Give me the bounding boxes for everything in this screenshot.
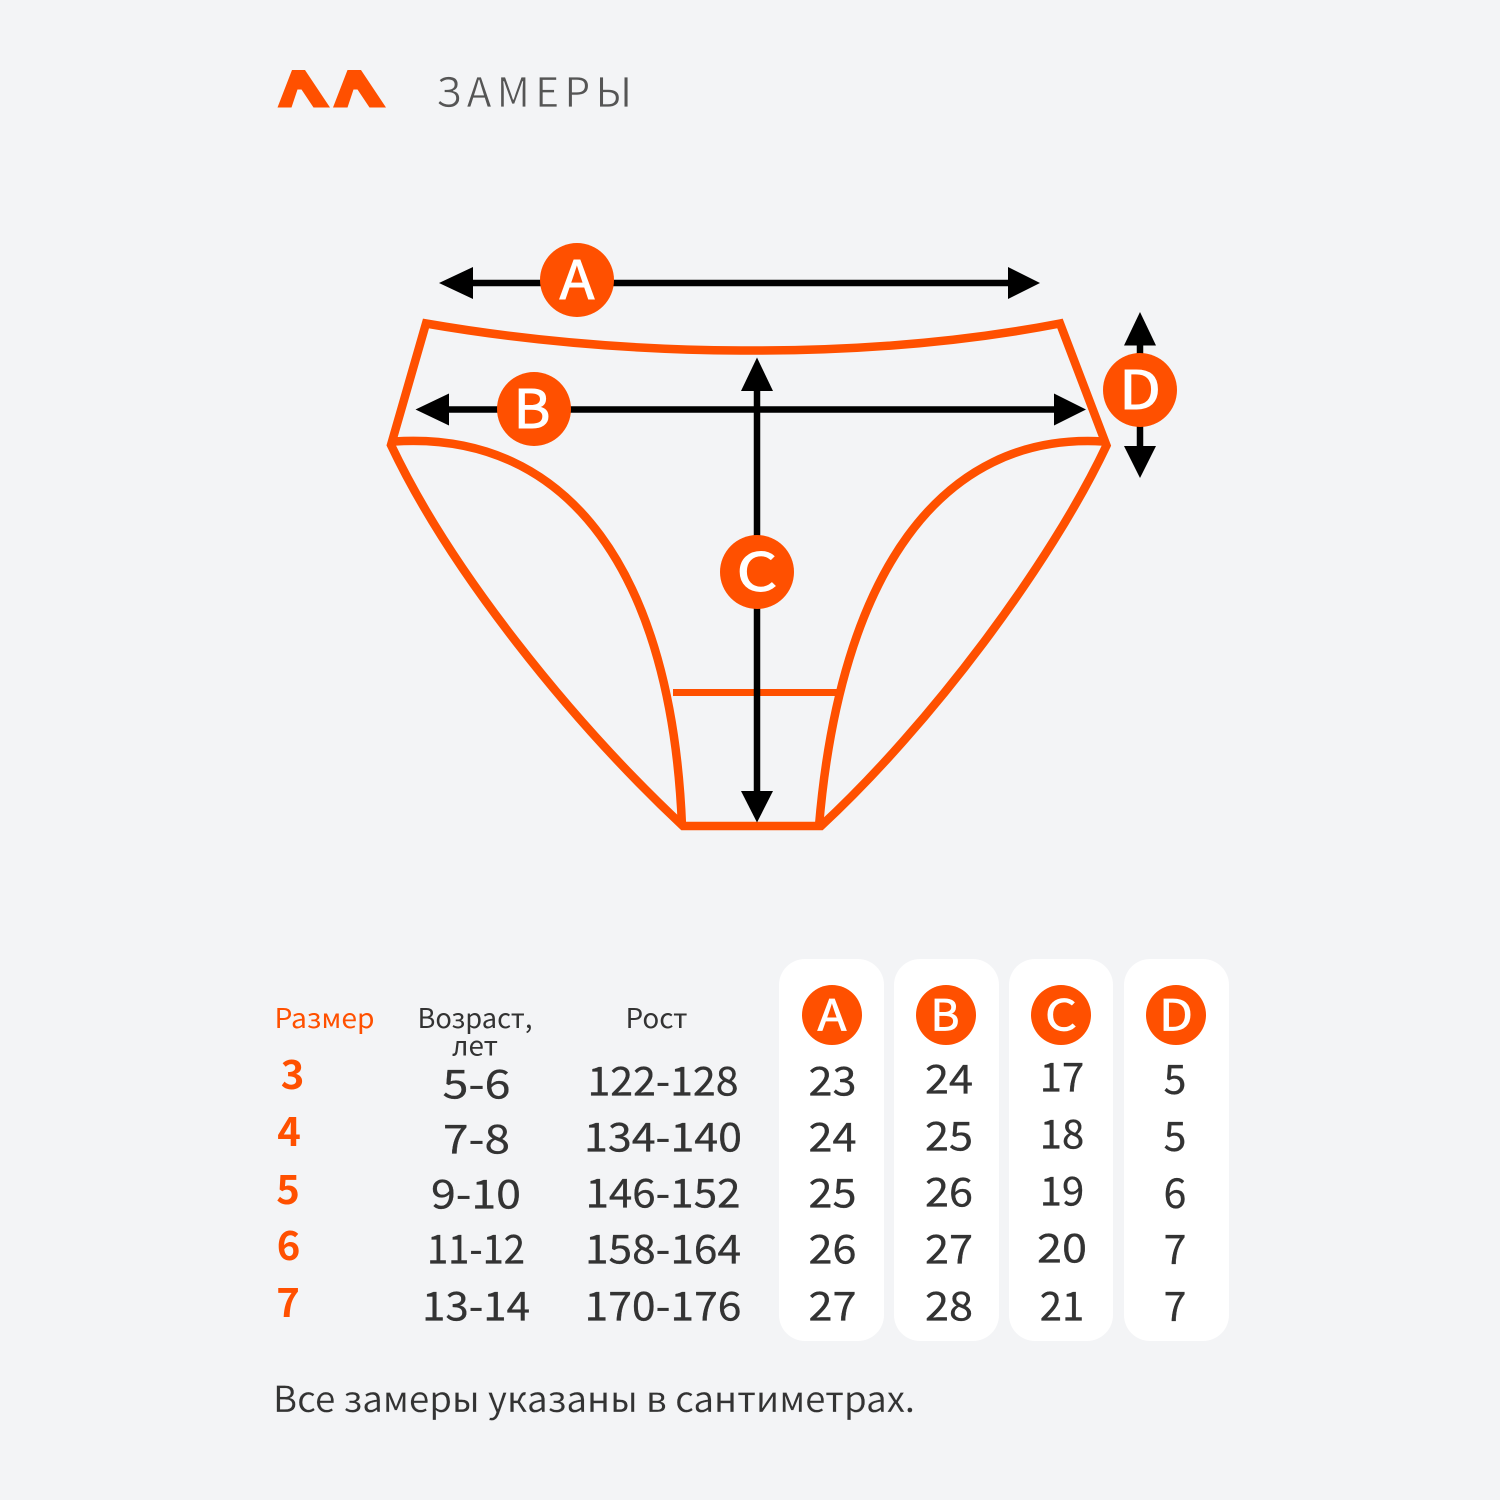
marker C (720, 531, 794, 609)
values D: 5 (1164, 1103, 1186, 1163)
column panel C (1009, 959, 1113, 1341)
values C: 17 (1040, 1046, 1084, 1104)
values A: 23 (808, 1050, 856, 1108)
values C: 18 (1040, 1102, 1084, 1160)
table headers: Возраст, (418, 997, 532, 1036)
age column: 5-6 (442, 1052, 510, 1110)
values A: 26 (808, 1218, 856, 1276)
size column: 7 (276, 1271, 300, 1329)
values B: 27 (925, 1218, 973, 1276)
column badge D (1146, 982, 1206, 1045)
size column: 4 (277, 1100, 301, 1158)
column panel A (779, 959, 884, 1341)
arrow C (741, 358, 773, 822)
values D: 7 (1164, 1216, 1186, 1276)
column badge B: B (930, 982, 960, 1044)
values C: 19 (1040, 1160, 1084, 1218)
values D: 6 (1164, 1160, 1186, 1220)
age column (422, 1052, 530, 1332)
values B: 26 (925, 1160, 973, 1218)
values B: 24 (925, 1048, 973, 1106)
column badge D: D (1159, 982, 1193, 1044)
height column: 122-128 (588, 1050, 738, 1108)
column badge B (916, 982, 976, 1045)
marker A: A (560, 239, 594, 315)
column panel B (894, 959, 999, 1341)
table headers (274, 997, 688, 1064)
garment outline (391, 324, 1106, 826)
values B (925, 1048, 973, 1332)
values B: 28 (925, 1274, 973, 1332)
values A (808, 1050, 856, 1332)
values D: 5 (1164, 1046, 1186, 1106)
arrow B (416, 394, 1086, 426)
values C (1037, 1046, 1087, 1332)
footnote: Все замеры указаны в сантиметрах. (273, 1371, 915, 1423)
marker C: C (736, 531, 778, 607)
marker B: B (514, 368, 550, 444)
size column (276, 1043, 304, 1329)
table headers: Рост (626, 997, 688, 1036)
values A: 27 (808, 1274, 856, 1332)
column panel D (1124, 959, 1229, 1341)
size column: 3 (281, 1043, 304, 1101)
height column: 170-176 (584, 1274, 742, 1332)
values D: 7 (1164, 1273, 1186, 1333)
values B: 25 (925, 1104, 973, 1162)
height column: 134-140 (584, 1106, 742, 1164)
marker D (1103, 349, 1177, 427)
values C: 20 (1037, 1216, 1087, 1274)
arrow A (439, 267, 1040, 299)
age column: 11-12 (427, 1218, 525, 1276)
arrow D (1124, 312, 1156, 478)
height column (584, 1050, 742, 1332)
size column: 6 (277, 1214, 300, 1272)
logo (278, 70, 386, 108)
title: ЗАМЕРЫ (436, 59, 632, 119)
column badge A: A (818, 982, 846, 1044)
column badge C (1031, 982, 1091, 1045)
values C: 21 (1040, 1274, 1084, 1332)
table headers: лет (452, 1024, 498, 1064)
marker B (497, 368, 571, 446)
age column: 9-10 (431, 1162, 521, 1220)
column badge C: C (1045, 982, 1077, 1044)
values A: 25 (808, 1162, 856, 1220)
table headers: Размер (274, 997, 374, 1036)
marker D: D (1119, 349, 1161, 425)
height column: 158-164 (585, 1218, 741, 1276)
size column: 5 (276, 1158, 300, 1216)
marker A (540, 239, 614, 317)
height column: 146-152 (586, 1162, 740, 1220)
values D (1164, 1046, 1186, 1333)
values A: 24 (808, 1106, 856, 1164)
age column: 7-8 (443, 1108, 510, 1166)
column badge A (802, 982, 862, 1045)
age column: 13-14 (422, 1274, 530, 1332)
